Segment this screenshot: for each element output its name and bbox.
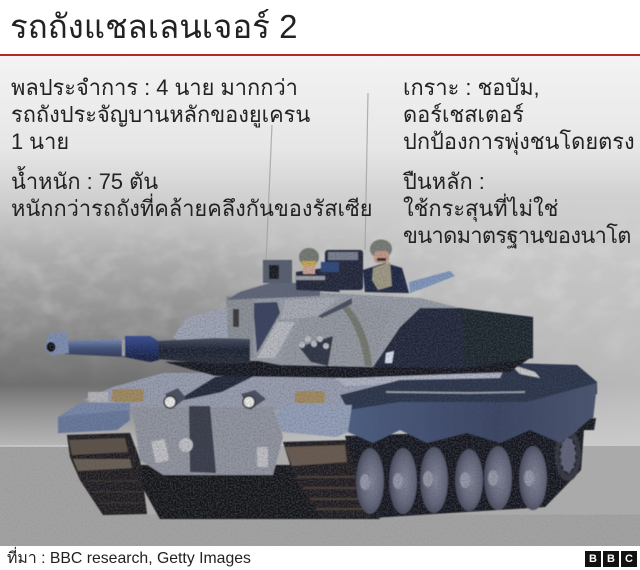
left track xyxy=(67,433,147,515)
text block: armour: เกราะ : ชอบัม, xyxy=(403,75,540,100)
emblem xyxy=(385,351,394,363)
crew member: commander xyxy=(363,240,409,293)
side skirt xyxy=(348,383,597,443)
background: grass ground xyxy=(0,405,640,546)
side track and road wheels xyxy=(345,428,584,518)
title: รถถังแชลเลนเจอร์ 2 xyxy=(10,8,297,45)
right front track xyxy=(283,440,372,519)
text block: main gun: ใช้กระสุนที่ไม่ใช่ xyxy=(403,196,558,221)
text block: weight: หนักกว่ารถถังที่คล้ายคลึงกันของรัสเซีย xyxy=(11,196,373,221)
text block: main gun: ขนาดมาตรฐานของนาโต xyxy=(403,223,631,248)
turret shadow xyxy=(165,358,530,378)
turret cheek xyxy=(173,307,228,345)
hull deck xyxy=(83,366,520,410)
smoke dischargers xyxy=(299,336,333,366)
turret roof xyxy=(226,290,460,367)
gun barrel xyxy=(45,333,250,364)
BBC logo: C xyxy=(625,553,633,565)
text block: weight: น้ำหนัก : 75 ตัน xyxy=(11,169,158,194)
text block: crew: พลประจำการ : 4 นาย มากกว่า xyxy=(11,75,298,100)
icon: antennas xyxy=(266,93,368,262)
text block: armour: ปกป้องการพุ่งชนโดยตรง xyxy=(403,129,635,154)
text block: main gun xyxy=(403,169,631,248)
commander's sight xyxy=(226,260,320,300)
BBC logo: B xyxy=(607,553,615,565)
text block: crew: รถถังประจัญบานหลักของยูเครน xyxy=(11,102,310,127)
source caption: ที่มา : BBC research, Getty Images xyxy=(7,550,251,567)
illustration: Challenger 2 tank xyxy=(45,240,597,519)
BBC logo xyxy=(585,551,637,567)
ground shadow xyxy=(130,465,380,519)
divider line xyxy=(0,54,640,56)
front hull plate xyxy=(132,407,283,475)
headlights and stowage xyxy=(88,388,325,410)
open hatch xyxy=(409,271,455,293)
left fender xyxy=(58,403,130,433)
text block: weight xyxy=(11,166,373,221)
turret main armour highlights xyxy=(280,303,392,366)
text block: crew xyxy=(11,75,310,154)
turret rear block xyxy=(373,308,533,368)
text block: armour xyxy=(403,75,635,155)
sight equipment xyxy=(321,250,363,290)
text block: main gun: ปืนหลัก : xyxy=(403,169,485,194)
rear hull upper side xyxy=(340,363,597,410)
text block: armour: ดอร์เชสเตอร์ xyxy=(403,102,524,127)
right fender xyxy=(273,405,352,437)
text block: crew: 1 นาย xyxy=(11,129,69,154)
background: misty sky xyxy=(0,56,640,450)
crew member: gunner xyxy=(295,248,340,292)
BBC logo: B xyxy=(589,553,597,565)
